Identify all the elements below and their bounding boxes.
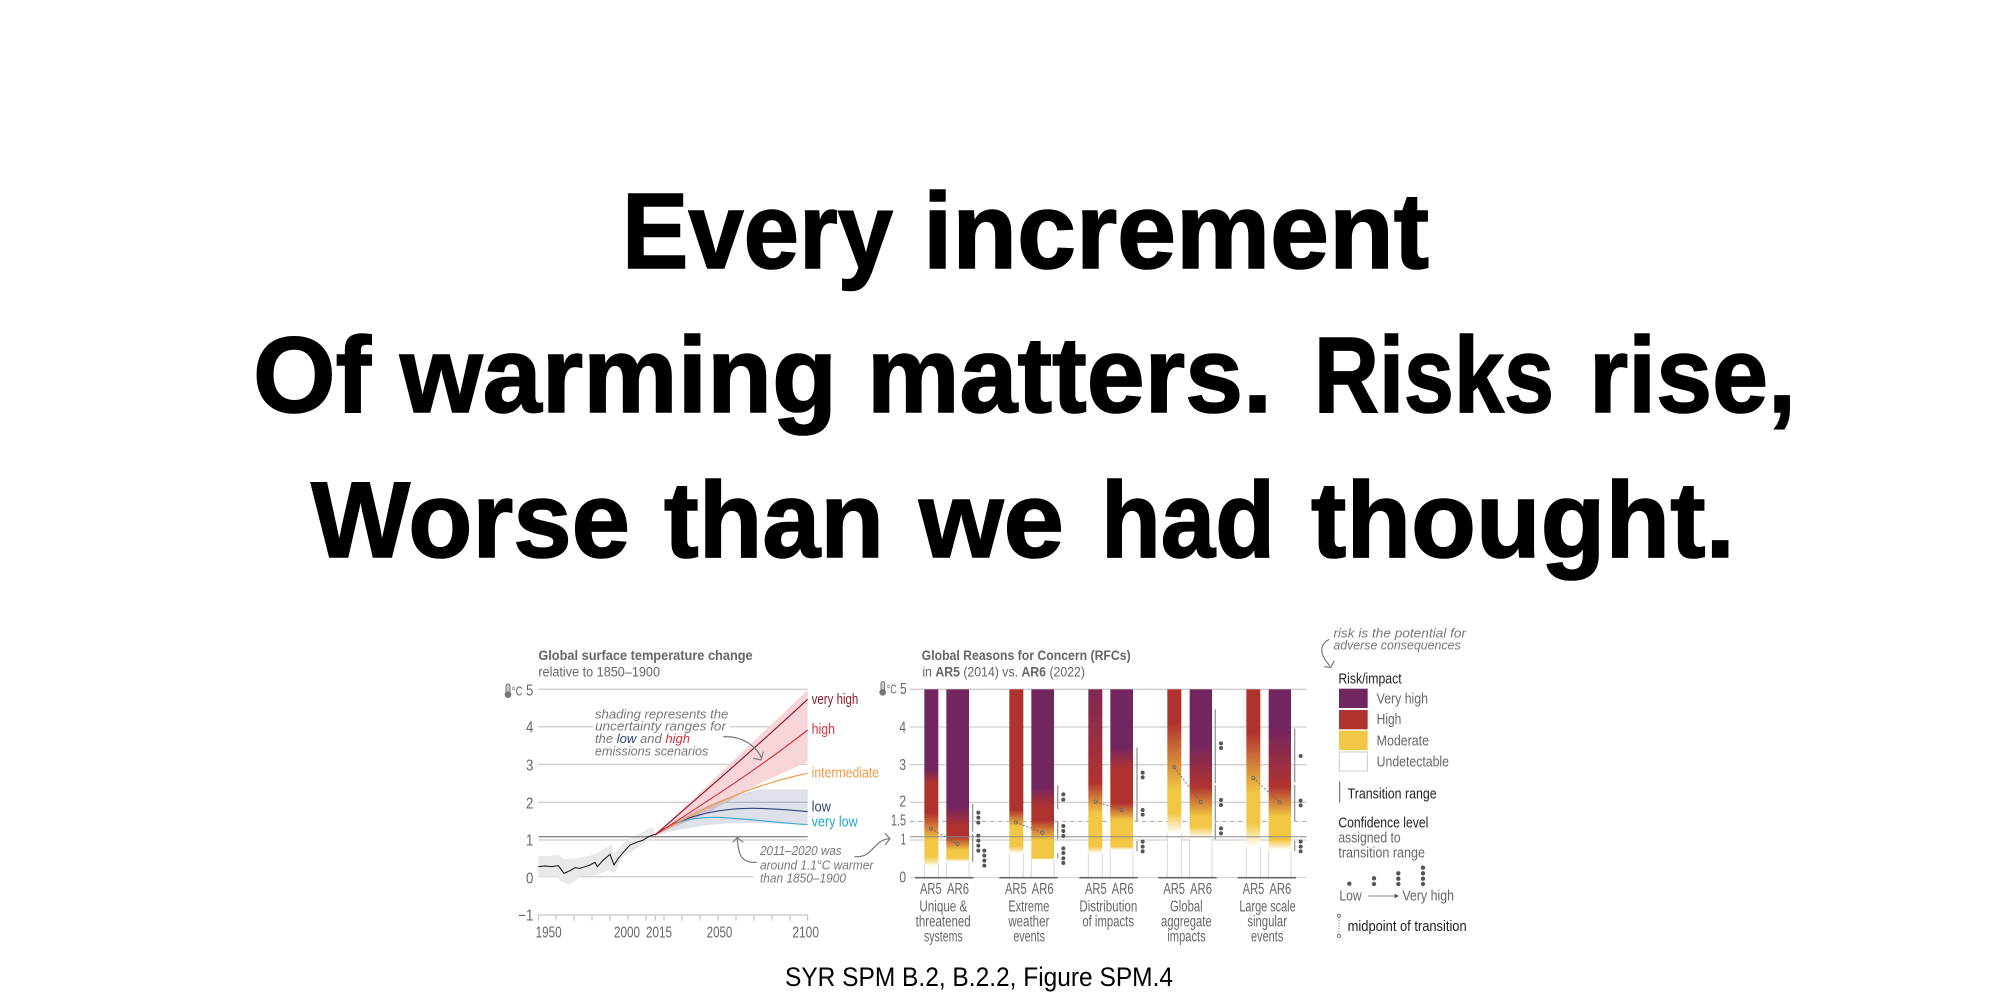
legend: confidence level heading: [1338, 816, 1428, 861]
bar labels AR5 AR6: AR6: [947, 881, 969, 898]
bar labels AR5 AR6: AR5: [1243, 881, 1264, 898]
swatch: very high: [1339, 689, 1428, 708]
annotation: shading: shading represents the: [595, 707, 728, 721]
x axis: 2100: [792, 924, 819, 941]
title: increment: [923, 170, 1429, 291]
bar labels AR5 AR6: AR5: [1005, 881, 1027, 898]
title: Risks: [1314, 314, 1554, 435]
swatch: very high: Very high: [1377, 691, 1428, 707]
bars: unique and threatened systems: [924, 689, 969, 878]
y axis labels: 4: [526, 720, 534, 737]
x axis: 2015: [646, 924, 672, 941]
legend: confidence dots: [1347, 865, 1425, 886]
y axis labels: 2: [899, 794, 906, 811]
category labels: weather: [1008, 914, 1049, 931]
swatch: undetectable: [1339, 752, 1449, 771]
swatch: moderate: Moderate: [1377, 733, 1429, 749]
category labels: impacts: [1167, 929, 1206, 946]
scenario labels: [812, 692, 879, 831]
category labels: of impacts: [1082, 914, 1134, 931]
x axis: 2050: [707, 924, 732, 941]
bar labels AR5 AR6: AR5: [920, 881, 942, 898]
bars: distribution of impacts: [1088, 689, 1133, 878]
legend: confidence level heading: assigned to: [1338, 831, 1401, 847]
annotation: shading: [595, 707, 728, 759]
swatch: high: [1339, 710, 1401, 729]
bars: global aggregate impacts: [1167, 689, 1212, 878]
panel: legend: [1322, 626, 1467, 937]
legend: transition range: Transition range: [1348, 786, 1437, 802]
bar labels AR5 AR6: AR6: [1112, 881, 1134, 898]
category labels: Large scale: [1239, 899, 1296, 916]
legend: midpoint of transition: [1337, 914, 1467, 937]
y axis labels: °C: [512, 685, 523, 699]
confidence dots: [976, 741, 1303, 868]
scenario labels: intermediate: [812, 765, 879, 781]
y axis labels: 3: [526, 757, 533, 774]
x axis: 2000: [614, 924, 640, 941]
legend: confidence level heading: transition range: [1338, 845, 1425, 861]
heading: temperature chart: Global surface temperature change: [538, 647, 753, 663]
legend: transition range: [1340, 781, 1437, 803]
legend: confidence level heading: Confidence level: [1338, 816, 1428, 832]
annotation: shading: the low and high: [595, 732, 690, 746]
legend: low to very high: Very high: [1402, 889, 1454, 905]
title: had: [1101, 459, 1275, 580]
panel: global surface temperature change: [505, 647, 890, 941]
y axis labels: 0: [899, 870, 906, 887]
annotation: 2011-2020: [759, 844, 874, 886]
bar labels AR5 AR6: AR6: [1032, 881, 1054, 898]
annotation: risk definition: [1333, 626, 1467, 652]
category labels: aggregate: [1161, 914, 1212, 931]
low scenario uncertainty band: [655, 789, 808, 835]
y axis labels: °C: [887, 682, 897, 696]
title: warming: [399, 314, 837, 435]
x axis: 1950: [536, 924, 562, 941]
heading: RFC chart: Global Reasons for Concern (RFCs): [922, 647, 1131, 663]
category labels: [916, 899, 1296, 946]
annotation: risk definition: adverse consequences: [1333, 638, 1461, 652]
arrow: to shading: [723, 737, 763, 760]
bars: large scale singular events: [1246, 689, 1291, 878]
heading: temperature chart: relative to 1850–1900: [538, 664, 660, 680]
x axis: [536, 915, 819, 941]
annotation: shading: emissions scenarios: [595, 745, 709, 759]
category labels: threatened: [916, 914, 971, 931]
annotation: 2011-2020: than 1850–1900: [760, 872, 846, 886]
transition ranges: [973, 709, 1295, 862]
bar labels AR5 AR6: [920, 881, 1291, 898]
title: thought.: [1311, 459, 1735, 580]
arrow: to reference line: [733, 838, 757, 862]
annotation: 2011-2020: around 1.1°C warmer: [760, 858, 874, 872]
scenario labels: low: [812, 800, 831, 816]
historical uncertainty band: [538, 827, 655, 885]
swatch: moderate: [1339, 731, 1429, 750]
y axis labels: 4: [899, 719, 906, 736]
icon: thermometer: [879, 682, 886, 696]
title: Worse: [311, 459, 630, 580]
heading: RFC chart: in AR5 (2014) vs. AR6 (2022): [922, 664, 1085, 680]
y axis labels: [512, 683, 534, 925]
y axis labels: 3: [899, 757, 906, 774]
bar labels AR5 AR6: AR5: [1085, 881, 1107, 898]
historical temperature line: [538, 834, 655, 873]
category labels: Extreme: [1008, 899, 1049, 916]
icon: thermometer: [505, 684, 511, 698]
scenario lines: [655, 699, 808, 835]
category labels: events: [1251, 929, 1284, 946]
baseline segments: [915, 875, 1296, 880]
source caption: SYR SPM B.2, B.2.2, Figure SPM.4: [785, 962, 1173, 992]
arrow: to right chart: [854, 833, 890, 857]
heading: temperature chart: [538, 647, 753, 680]
y axis labels: 1.5: [891, 813, 906, 830]
annotation: risk definition: risk is the potential for: [1333, 626, 1467, 640]
scenario labels: very high: [812, 692, 858, 708]
legend heading: risk impact: Risk/impact: [1338, 671, 1402, 687]
high scenario uncertainty band: [655, 690, 808, 835]
annotation: 2011-2020: 2011–2020 was: [759, 844, 842, 858]
title: rise,: [1589, 314, 1796, 435]
annotation: shading: uncertainty ranges for: [595, 720, 727, 734]
y axis labels: 2: [526, 795, 533, 812]
title: we: [918, 459, 1064, 580]
swatch: undetectable: Undetectable: [1377, 755, 1449, 771]
heading: RFC chart: [922, 647, 1131, 680]
midpoint markers: [929, 766, 1281, 846]
1.1 degree reference line: [538, 835, 808, 839]
arrow: risk note: [1322, 639, 1334, 667]
bar labels AR5 AR6: AR6: [1269, 881, 1291, 898]
y axis labels: 1: [901, 831, 906, 848]
category labels: singular: [1247, 914, 1287, 931]
legend: midpoint of transition: midpoint of transition: [1348, 919, 1467, 935]
category labels: systems: [924, 929, 963, 946]
category labels: Unique &: [919, 899, 967, 916]
bar labels AR5 AR6: AR6: [1190, 881, 1212, 898]
y axis labels: 5: [900, 681, 907, 698]
category labels: Distribution: [1079, 899, 1137, 916]
title: [253, 170, 1796, 580]
y axis labels: −1: [518, 908, 533, 925]
panel: global reasons for concern: [879, 647, 1307, 946]
bars: extreme weather events: [1009, 689, 1054, 878]
scenario labels: very low: [812, 815, 858, 831]
y axis labels: 0: [526, 870, 533, 887]
title: Every: [622, 170, 893, 291]
legend: low to very high: [1339, 889, 1454, 905]
legend: low to very high: Low: [1339, 889, 1362, 905]
category labels: events: [1013, 929, 1045, 946]
scenario labels: high: [812, 722, 835, 738]
bar labels AR5 AR6: AR5: [1163, 881, 1185, 898]
title: than: [664, 459, 884, 580]
title: matters.: [867, 314, 1272, 435]
category labels: Global: [1170, 899, 1203, 916]
title: Of: [253, 314, 372, 435]
y axis labels: 1: [526, 833, 533, 850]
swatch: high: High: [1377, 712, 1401, 728]
y axis labels: [887, 681, 907, 887]
y axis labels: 5: [526, 683, 533, 700]
